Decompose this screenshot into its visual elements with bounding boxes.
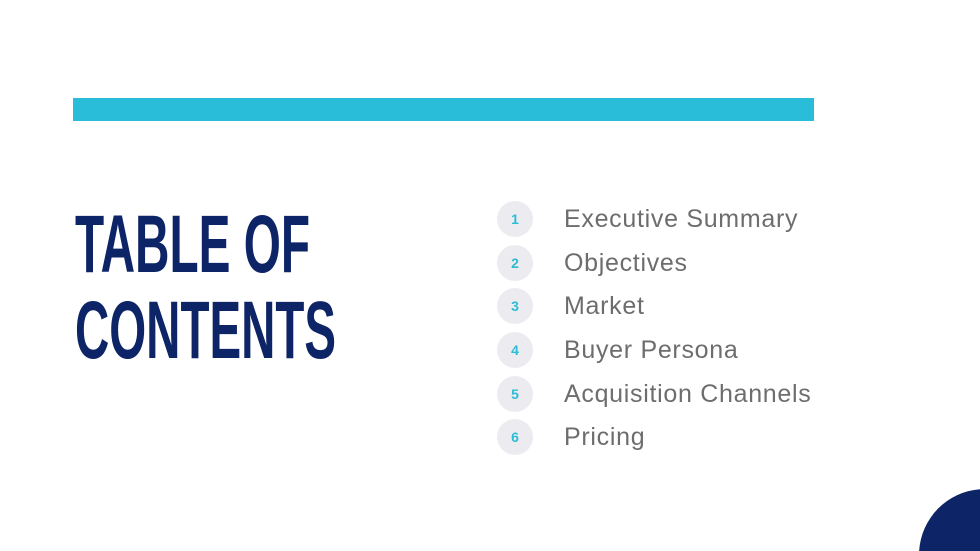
item 4: [497, 332, 738, 368]
title: [75, 199, 336, 376]
item 3: 3: [511, 298, 519, 314]
item 2: 2: [511, 255, 519, 271]
top accent bar: [73, 98, 814, 121]
item 1: [497, 201, 798, 237]
item 4: 4: [511, 342, 519, 358]
item 2: [497, 245, 688, 281]
item 5: [497, 376, 811, 412]
item 6: 6: [511, 429, 519, 445]
item 6: Pricing: [564, 423, 645, 451]
item 6: [497, 419, 645, 455]
item 3: [497, 288, 645, 324]
item 3: Market: [564, 292, 645, 320]
corner navy circle: [919, 489, 980, 551]
item 1: Executive Summary: [564, 205, 798, 233]
item 4: Buyer Persona: [564, 336, 738, 364]
item 5: 5: [511, 386, 519, 402]
item 1: 1: [511, 211, 519, 227]
item 2: Objectives: [564, 249, 688, 277]
item 5: Acquisition Channels: [564, 380, 811, 408]
